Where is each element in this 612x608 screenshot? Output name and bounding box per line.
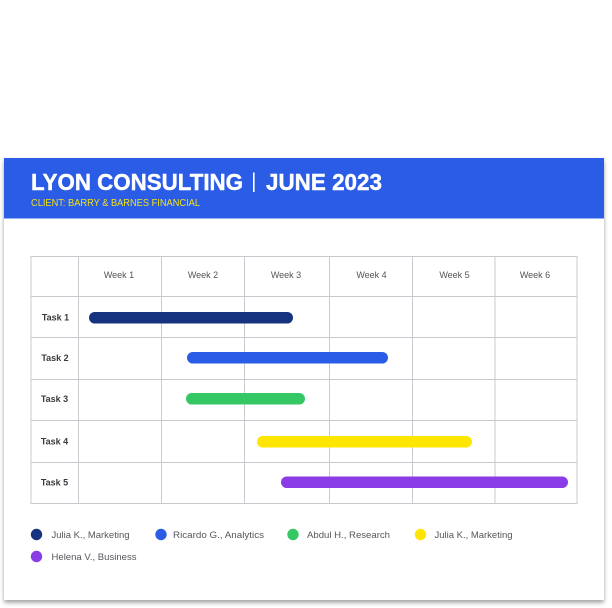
task labels: Task 5 (41, 478, 68, 488)
week headers: Week 6 (520, 270, 550, 280)
week headers: Week 2 (188, 270, 218, 280)
client subtitle: CLIENT: BARRY & BARNES FINANCIAL (31, 197, 200, 209)
title: JUNE 2023 (266, 169, 382, 195)
bar: task 1 (89, 312, 293, 324)
task labels: Task 3 (41, 394, 68, 404)
task labels: Task 1 (42, 312, 69, 322)
bar: task 4 (257, 436, 472, 448)
header band (4, 158, 604, 218)
title (31, 169, 382, 195)
bar: task 5 (281, 476, 568, 488)
legend item: Julia K., Marketing: Julia K., Marketing (434, 530, 512, 541)
task labels: Task 2 (41, 353, 69, 363)
task labels (41, 312, 69, 488)
week headers: Week 1 (104, 270, 134, 280)
week headers: Week 3 (271, 270, 301, 280)
table grid (31, 256, 577, 504)
week headers: Week 4 (356, 270, 387, 280)
task labels: Task 4 (41, 436, 68, 446)
week headers (104, 270, 550, 280)
report card background (4, 158, 604, 600)
legend item: Helena V., Business: Helena V., Business (52, 552, 137, 563)
bar: task 2 (187, 352, 388, 364)
title: LYON CONSULTING (31, 169, 243, 195)
legend item: Abdul H., Research: Abdul H., Research (307, 530, 390, 541)
gantt chart (31, 256, 577, 504)
legend item: Julia K., Marketing: Julia K., Marketing (52, 530, 130, 541)
week headers: Week 5 (439, 270, 470, 280)
legend (31, 529, 513, 563)
bar: task 3 (186, 393, 305, 404)
legend item: Ricardo G., Analytics: Ricardo G., Analytics (173, 530, 264, 541)
